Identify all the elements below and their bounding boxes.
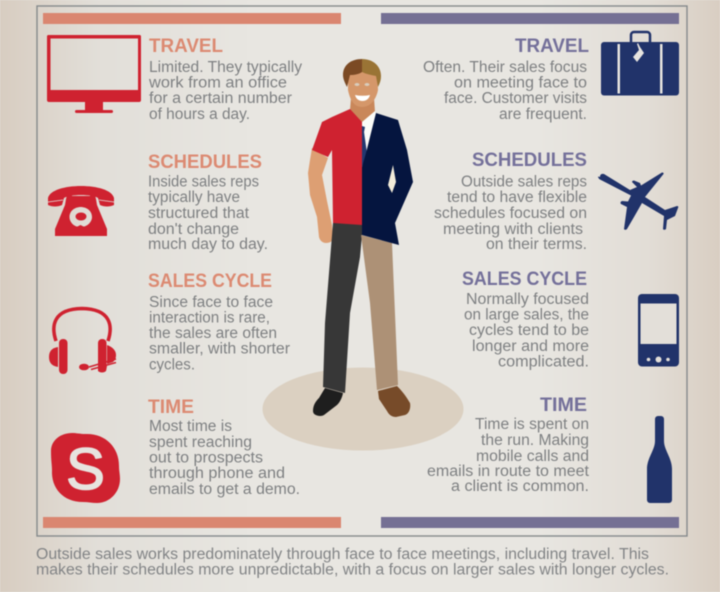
right column: sales cycle: complicated. bbox=[498, 354, 589, 370]
icon: skype logo: S bbox=[66, 437, 105, 502]
right column: schedules: Outside sales reps bbox=[461, 174, 587, 190]
shirt collar and tie bbox=[362, 111, 376, 170]
left column: sales cycle: smaller, with shorter bbox=[149, 340, 290, 358]
right column: travel: TRAVEL bbox=[515, 35, 589, 57]
neck and face bbox=[350, 98, 375, 124]
icon: skype logo bbox=[51, 433, 120, 503]
floor ellipse bbox=[262, 368, 464, 450]
left column: travel: work from an office bbox=[148, 74, 287, 92]
left column: schedules: much day to day. bbox=[148, 236, 268, 253]
left column: schedules: typically have bbox=[148, 189, 240, 206]
right top bar bbox=[381, 13, 679, 24]
icon: rotary telephone bbox=[48, 186, 114, 236]
right column: travel: are frequent. bbox=[499, 106, 587, 123]
right column: sales cycle: cycles tend to be bbox=[469, 322, 589, 339]
right column: sales cycle: on large sales, the bbox=[464, 306, 589, 324]
right column: sales cycle: Normally focused bbox=[466, 291, 589, 308]
right column: schedules: SCHEDULES bbox=[472, 149, 587, 171]
right bottom bar bbox=[381, 517, 679, 528]
shoes bbox=[313, 388, 343, 416]
left column: sales cycle: Since face to face bbox=[149, 294, 273, 311]
left column: travel bbox=[148, 35, 302, 123]
jacket bbox=[362, 113, 413, 245]
figure: half inside rep, half outside rep bbox=[308, 59, 413, 417]
pocket gap bbox=[388, 165, 396, 193]
icon: smartphone bbox=[638, 294, 679, 366]
left column: schedules: don't change bbox=[148, 221, 239, 238]
left column: schedules: SCHEDULES bbox=[148, 151, 262, 173]
trousers bbox=[323, 223, 362, 393]
right column: travel: on meeting face to bbox=[454, 74, 587, 92]
right column: sales cycle: longer and more bbox=[472, 338, 589, 355]
left column: schedules: structured that bbox=[148, 205, 250, 222]
icon: bottle bbox=[647, 416, 672, 503]
right column: travel: Often. Their sales focus bbox=[423, 59, 587, 76]
left column: time: out to prospects bbox=[149, 450, 263, 466]
left column: travel: TRAVEL bbox=[149, 35, 223, 57]
right column: time bbox=[427, 394, 590, 495]
left column: time: TIME bbox=[148, 396, 194, 418]
left column: time: Most time is bbox=[149, 418, 232, 435]
left top bar bbox=[43, 13, 341, 24]
left column: time bbox=[148, 396, 300, 498]
right column: time: the run. Making bbox=[481, 432, 589, 449]
right column: schedules bbox=[434, 149, 587, 253]
right column: travel: face. Customer visits bbox=[444, 90, 587, 107]
icon: suitcase bbox=[601, 32, 679, 96]
left column: travel: Limited. They typically bbox=[149, 59, 302, 76]
right column: schedules: meeting with clients bbox=[443, 221, 583, 238]
left column: time: spent reaching bbox=[149, 434, 252, 451]
smile and eyes bbox=[355, 95, 370, 101]
right column: time: TIME bbox=[540, 394, 587, 416]
red shirt bbox=[312, 109, 362, 225]
right column: travel bbox=[423, 35, 589, 123]
right column: schedules: schedules focused on bbox=[434, 205, 587, 222]
left column: travel: of hours a day. bbox=[149, 106, 250, 123]
left column: sales cycle bbox=[148, 270, 290, 374]
left column: schedules: Inside sales reps bbox=[148, 174, 259, 190]
left column: sales cycle: SALES CYCLE bbox=[148, 270, 272, 292]
footer summary text: Outside sales works predominately through face to face meetings, including travel. This bbox=[36, 546, 649, 563]
icon: airplane bbox=[598, 172, 678, 230]
left column: sales cycle: interaction is rare, bbox=[149, 310, 270, 326]
right column: sales cycle: SALES CYCLE bbox=[462, 268, 587, 290]
right column: schedules: tend to have flexible bbox=[447, 189, 587, 206]
hair bbox=[343, 59, 362, 87]
arm bbox=[308, 148, 333, 243]
left column: schedules bbox=[148, 151, 268, 253]
footer summary text: makes their schedules more unpredictable, with a focus on larger sales with longer cycles. bbox=[36, 562, 669, 578]
left column: sales cycle: cycles. bbox=[149, 356, 195, 374]
right column: time: a client is common. bbox=[451, 478, 589, 495]
left column: time: emails to get a demo. bbox=[149, 481, 300, 498]
left column: time: through phone and bbox=[149, 465, 285, 482]
icon: headset bbox=[49, 308, 116, 374]
footer summary text bbox=[36, 546, 669, 578]
right column: time: emails in route to meet bbox=[427, 463, 590, 480]
icon: desktop monitor bbox=[47, 35, 141, 113]
left column: travel: for a certain number bbox=[149, 90, 292, 107]
right column: schedules: on their terms. bbox=[486, 236, 587, 253]
left column: sales cycle: the sales are often bbox=[149, 325, 277, 342]
right column: time: Time is spent on bbox=[475, 416, 589, 433]
right column: time: mobile calls and bbox=[476, 448, 589, 465]
left bottom bar bbox=[43, 517, 341, 528]
right column: sales cycle bbox=[462, 268, 589, 370]
